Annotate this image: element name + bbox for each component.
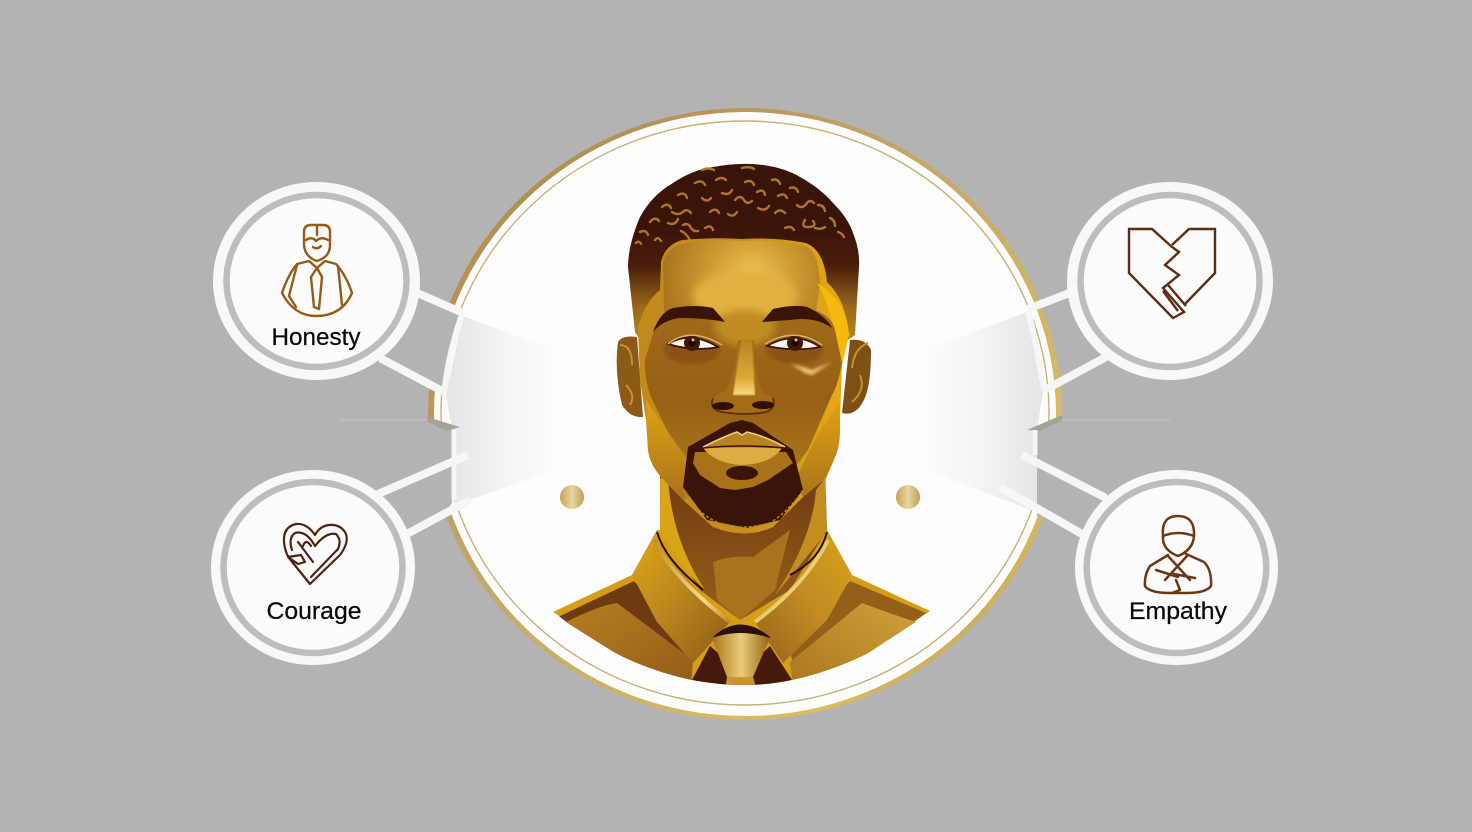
eye right [765,335,822,351]
collar left [632,530,730,663]
badge: Courage [211,470,415,665]
forehead blend [693,270,797,322]
badge rings [213,182,420,380]
collar edges [654,540,730,622]
cheek glint [790,362,832,375]
ear right [842,340,871,414]
hair [628,164,859,340]
collar right [755,530,852,663]
side wash right [920,312,1043,512]
label: Empathy [1129,598,1227,625]
jaw highlight [646,400,840,500]
label: Courage [266,598,362,625]
temple highlight [817,283,849,365]
badge rings [1075,470,1278,665]
eye left [668,335,722,351]
nose [712,340,774,414]
soul patch [726,466,758,480]
portrait: golden man [553,164,930,700]
tie [692,624,792,690]
beard and moustache [683,420,803,528]
eye sockets [664,336,720,364]
label: Honesty [272,324,360,351]
badge rings [211,470,415,665]
white disc [434,112,1056,716]
gold outer rim [428,108,1062,720]
beard edge [683,490,803,527]
thin inner gold ring [441,121,1049,705]
eyebrow left [653,306,725,332]
badge rings [1067,182,1273,380]
notch details [340,415,1170,431]
badge: Empathy [1075,470,1278,665]
shoulders and suit [553,530,930,700]
connector lines [378,292,1106,535]
badge: Honesty [213,182,420,380]
hair curls [636,167,844,244]
icon: broken heart [1129,229,1215,318]
forehead [663,240,820,312]
eyebrow right [762,306,832,328]
lips [703,432,785,465]
gold dot left [560,485,584,509]
badge: broken heart [1067,182,1273,380]
side wash left [446,316,560,505]
gold dot right [896,485,920,509]
face [638,238,849,533]
icon: heart with ribbon [284,524,347,584]
neck [660,470,827,620]
icon: man with tie [282,225,352,316]
left rim cut-outs [378,296,1100,534]
main portrait medallion [428,108,1062,720]
inner face shading [645,308,842,490]
chin patch [693,452,793,490]
icon: person with folded arms [1145,516,1211,593]
ear left [617,337,643,417]
